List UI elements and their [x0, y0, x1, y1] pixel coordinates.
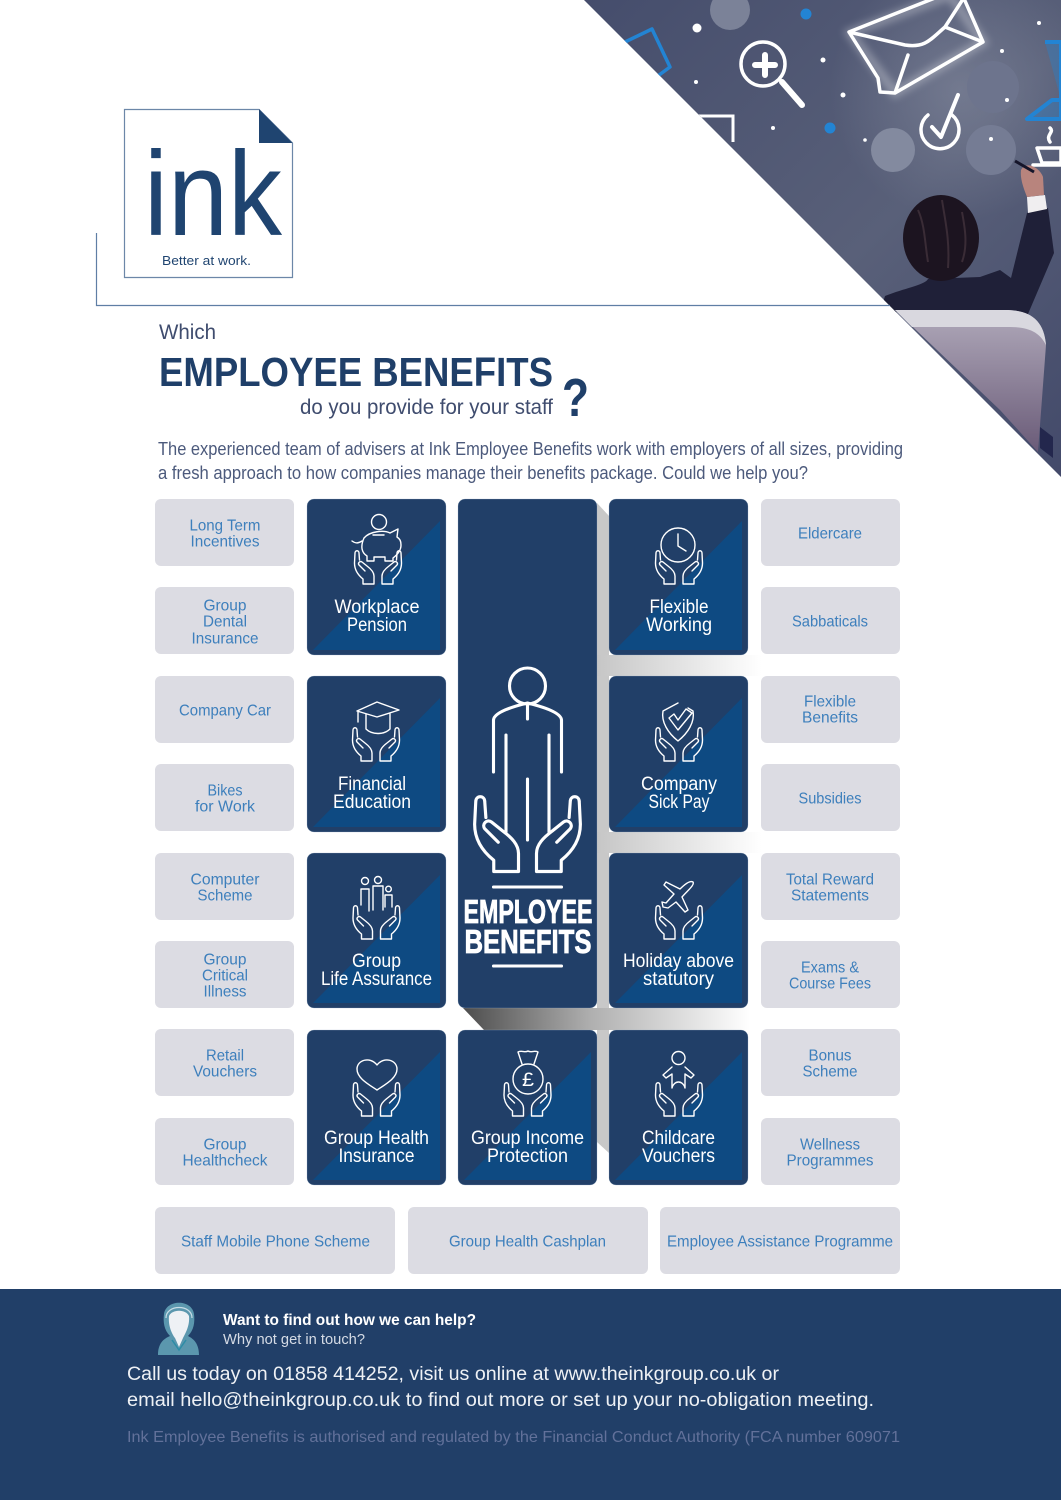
tile: group income protection: £	[522, 1070, 534, 1091]
tile: group health insurance: Insurance	[338, 1146, 414, 1167]
tile: holiday above statutory: Holiday above	[623, 951, 734, 972]
left column grey tiles: Bikes	[208, 782, 242, 799]
bottom row grey tiles: Staff Mobile Phone Scheme	[181, 1233, 370, 1250]
left column grey tiles: Dental	[203, 613, 247, 630]
tile: financial education: Financial	[338, 774, 406, 795]
heading: ?	[562, 368, 589, 428]
tile: group income protection: Group Income	[471, 1128, 584, 1149]
frame lines around logo	[96, 233, 890, 306]
right column grey tiles: Flexible	[804, 693, 856, 710]
tile: company sick pay: Company	[641, 774, 717, 795]
right column grey tiles: Programmes	[786, 1152, 874, 1169]
left column grey tiles: Vouchers	[193, 1063, 257, 1080]
tile: childcare vouchers	[609, 1030, 748, 1185]
tile: financial education: Education	[333, 792, 411, 813]
tile: group life assurance: Life Assurance	[321, 969, 432, 990]
left column grey tiles: Insurance	[192, 630, 259, 647]
heading	[159, 321, 589, 428]
left column grey tiles: Long Term	[190, 517, 260, 534]
central column: employee benefits	[458, 499, 597, 1008]
tile: company sick pay	[609, 676, 748, 832]
tile: flexible working: Working	[646, 615, 712, 636]
icon: person held in hands	[475, 668, 580, 966]
bottom row grey tiles: Group Health Cashplan	[449, 1233, 606, 1250]
left column grey tiles	[155, 499, 294, 1185]
tile: flexible working: Flexible	[650, 597, 708, 618]
intro text: a fresh approach to how companies manage their benefits package. Could we help you?	[158, 463, 808, 483]
right column grey tiles: Eldercare	[798, 525, 862, 542]
icon: support agent	[158, 1303, 199, 1355]
tile: group health insurance	[307, 1030, 446, 1185]
intro text: The experienced team of advisers at Ink Employee Benefits work with employers of all sizes, providing	[158, 439, 903, 459]
heading: Which	[159, 321, 216, 344]
left column grey tiles: Retail	[206, 1047, 244, 1064]
left column grey tiles: Group	[204, 597, 247, 614]
left column grey tiles: Group	[204, 1136, 247, 1153]
tile: workplace pension: Workplace	[334, 597, 420, 618]
right column grey tiles: Total Reward	[786, 871, 874, 888]
tile: holiday above statutory	[609, 853, 748, 1008]
footer band	[0, 1289, 1061, 1500]
left column grey tiles: Scheme	[198, 887, 253, 904]
logo: ink, better at work: Better at work.	[162, 253, 251, 268]
tile: company sick pay: Sick Pay	[648, 792, 710, 813]
tile: financial education	[307, 676, 446, 832]
left column grey tiles: Company Car	[179, 702, 272, 719]
right column grey tiles: Scheme	[802, 1063, 858, 1080]
tile: workplace pension	[307, 499, 446, 655]
footer band: Call us today on 01858 414252, visit us online at www.theinkgroup.co.uk or	[127, 1364, 780, 1385]
right column grey tiles: Sabbaticals	[792, 613, 868, 630]
left column grey tiles: Computer	[190, 871, 260, 888]
footer band: email hello@theinkgroup.co.uk to find out more or set up your no-obligation meeting.	[127, 1390, 874, 1411]
left column grey tiles: Incentives	[190, 533, 260, 550]
footer band: Why not get in touch?	[223, 1332, 365, 1348]
right column grey tiles: Exams &	[801, 959, 859, 976]
left column grey tiles: Healthcheck	[182, 1152, 268, 1169]
left column grey tiles: Critical	[202, 967, 248, 984]
tile: group income protection	[458, 1030, 597, 1185]
right column grey tiles: Wellness	[800, 1136, 860, 1153]
bottom row grey tiles: Employee Assistance Programme	[667, 1233, 893, 1250]
tile: holiday above statutory: statutory	[643, 969, 714, 990]
logo: ink, better at work	[124, 109, 292, 278]
footer band: Ink Employee Benefits is authorised and regulated by the Financial Conduct Authority (FCA number 609071	[127, 1429, 900, 1446]
right column grey tiles	[761, 499, 900, 1185]
central column: employee benefits: BENEFITS	[464, 923, 592, 960]
central column: employee benefits: EMPLOYEE	[464, 893, 592, 930]
tile: childcare vouchers: Vouchers	[642, 1146, 715, 1167]
right column grey tiles: Bonus	[808, 1047, 852, 1064]
right column grey tiles: Course Fees	[789, 975, 871, 992]
right column grey tiles: Subsidies	[798, 790, 862, 807]
tile: group life assurance	[307, 853, 446, 1008]
right column grey tiles: Statements	[791, 887, 869, 904]
logo: ink, better at work: ink	[144, 127, 283, 261]
shadows behind central column	[463, 503, 762, 1153]
tile: group health insurance: Group Health	[324, 1128, 429, 1149]
intro text	[158, 439, 903, 483]
bottom row grey tiles	[155, 1207, 900, 1274]
left column grey tiles: for Work	[195, 798, 256, 815]
tile: flexible working	[609, 499, 748, 655]
tile: childcare vouchers: Childcare	[642, 1128, 715, 1149]
tile: workplace pension: Pension	[347, 615, 407, 636]
left column grey tiles: Illness	[204, 983, 246, 1000]
tile: group life assurance: Group	[352, 951, 401, 972]
heading: EMPLOYEE BENEFITS	[159, 349, 553, 395]
tile: group income protection: Protection	[487, 1146, 568, 1167]
right column grey tiles: Benefits	[802, 709, 858, 726]
heading: do you provide for your staff	[300, 396, 553, 419]
footer band: Want to find out how we can help?	[223, 1312, 476, 1329]
left column grey tiles: Group	[204, 951, 247, 968]
photo: man drawing icons on a wall	[584, 0, 1061, 477]
